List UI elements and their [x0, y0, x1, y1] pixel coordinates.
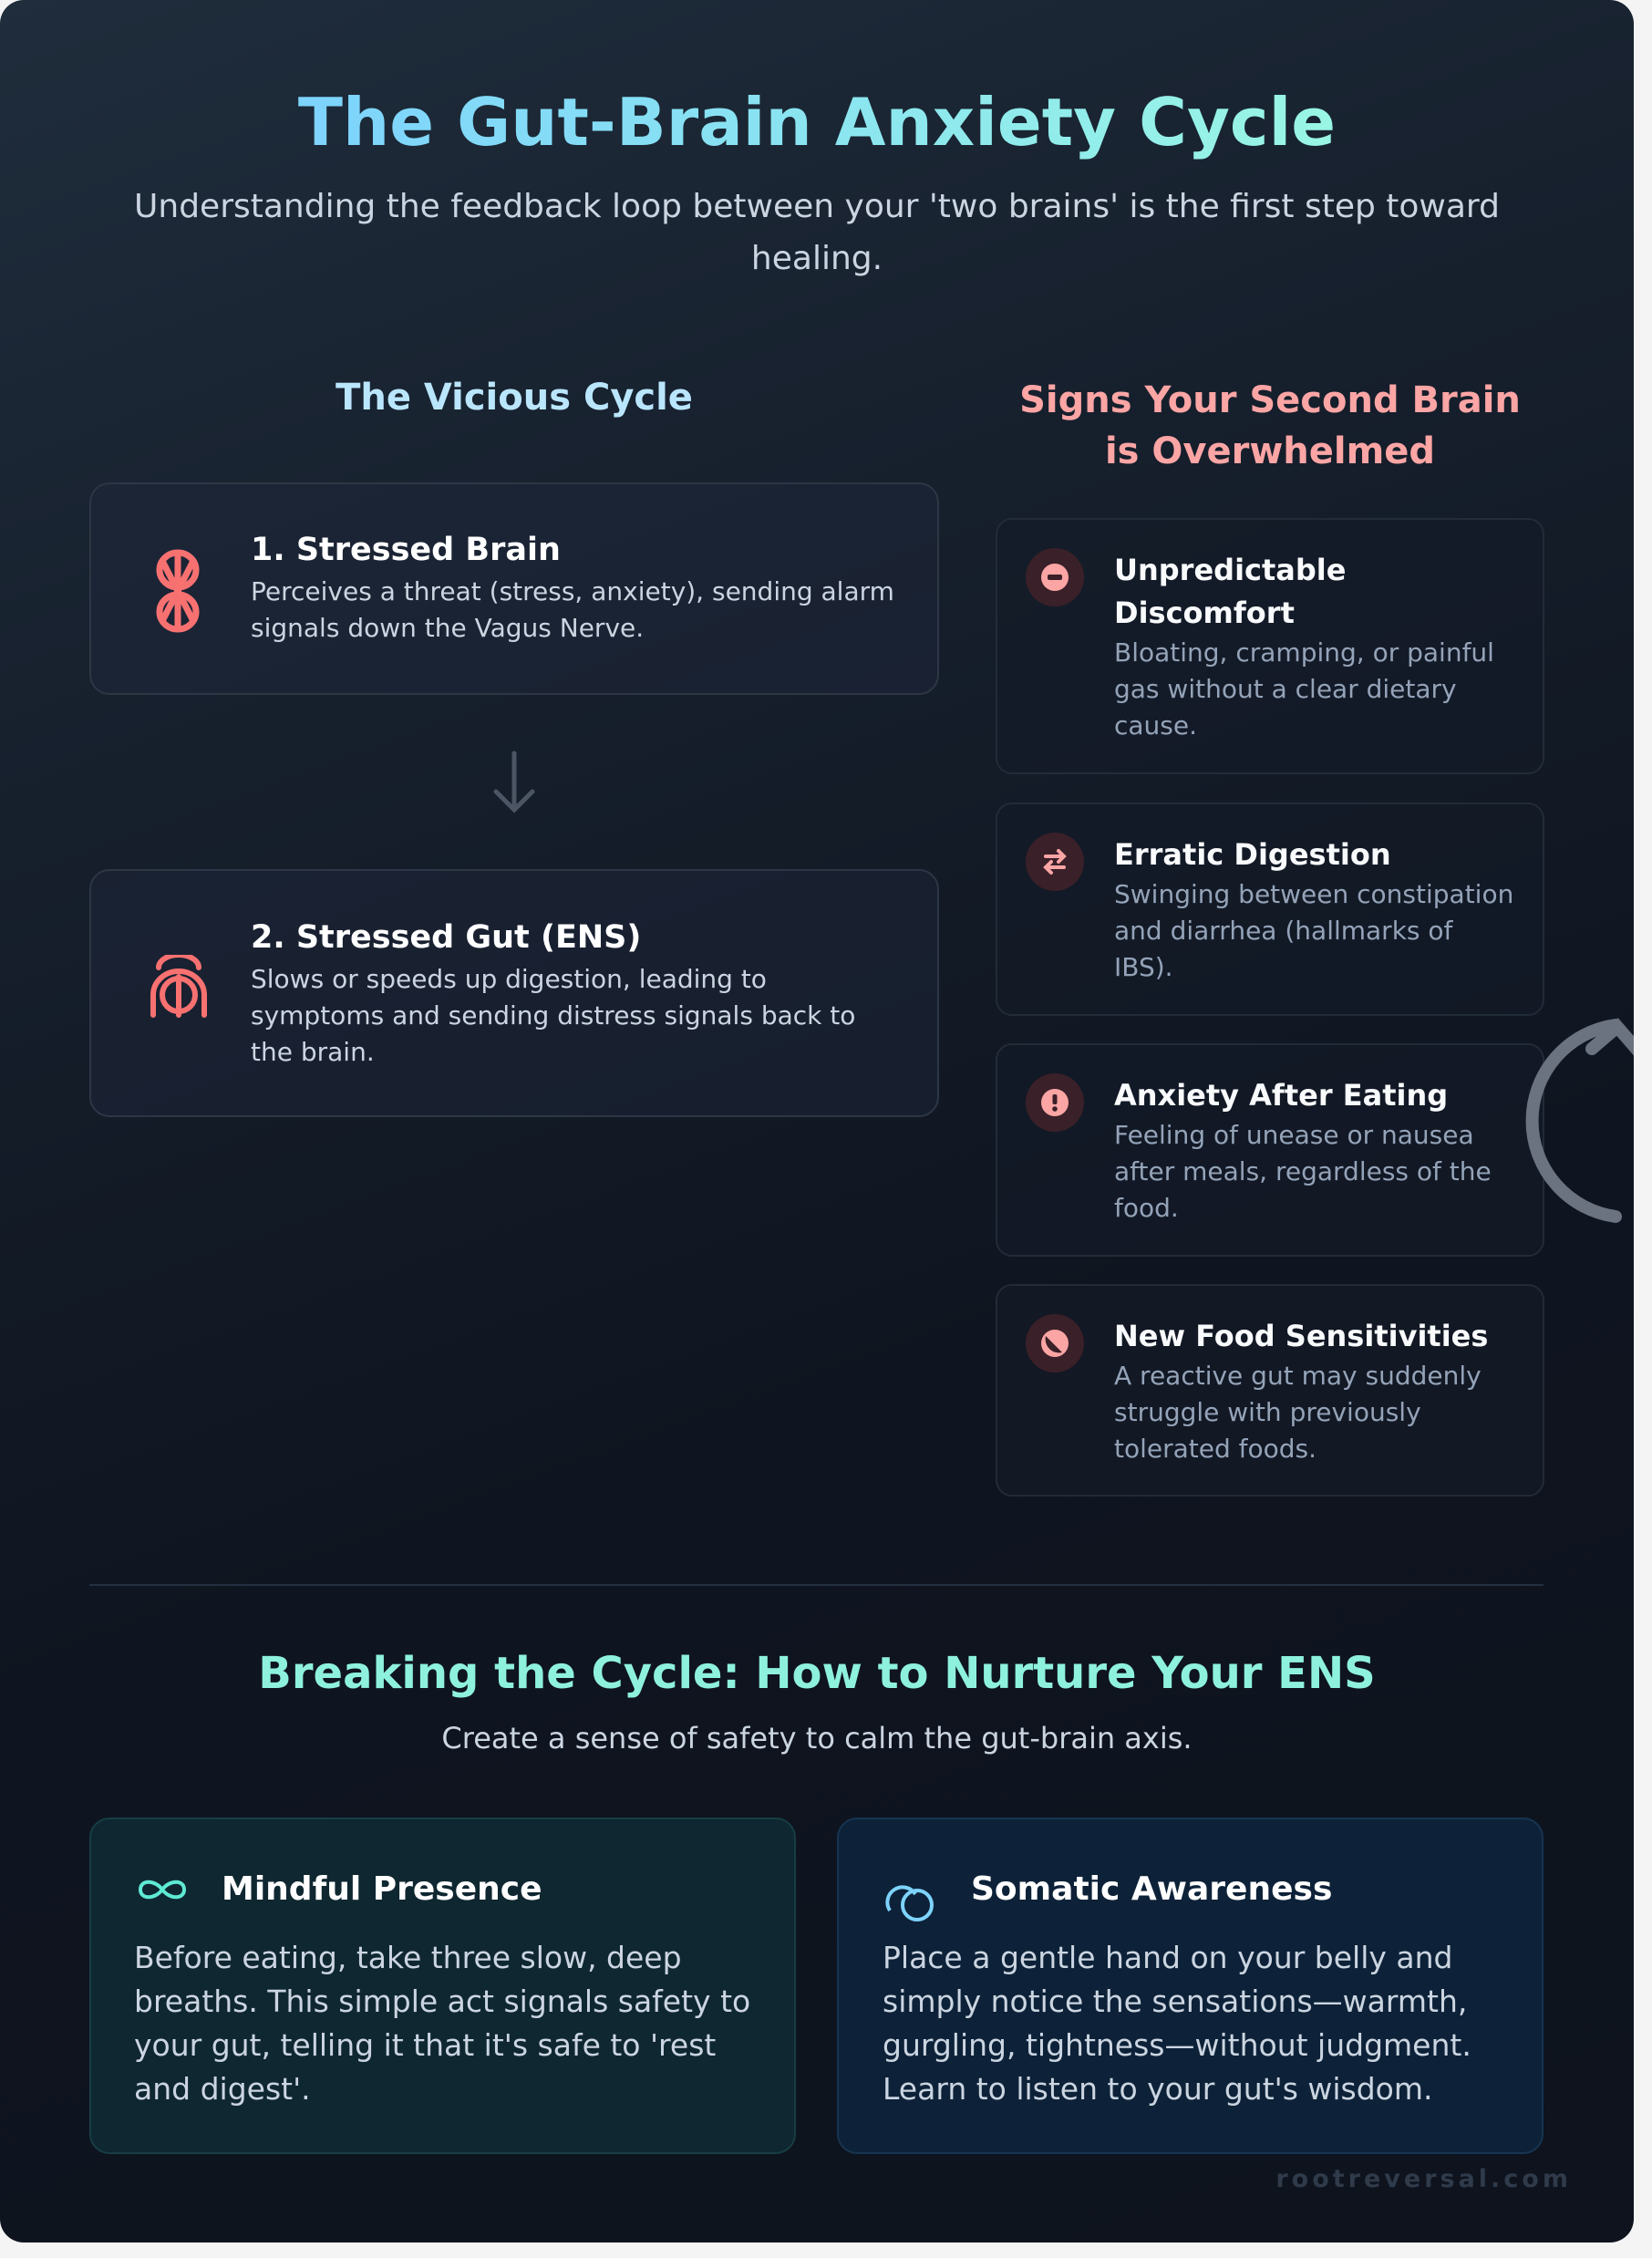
icon: blocked — [1026, 1314, 1084, 1372]
title: The Gut-Brain Anxiety Cycle — [298, 84, 1336, 161]
heading: vicious cycle: The Vicious Cycle — [336, 377, 693, 419]
sign: new food sensitivities: tolerated foods. — [1114, 1434, 1316, 1464]
sign: anxiety after eating: after meals, regardless of the — [1114, 1156, 1492, 1186]
sign: erratic digestion — [996, 803, 1544, 1016]
text: 1. Stressed Brain — [251, 532, 561, 568]
body: Place a gentle hand on your belly and simply notice the sensations—warmth, gurgling, tightness—without judgment. Learn to listen to your gut's wisdom. — [883, 1940, 1471, 2107]
panel: stressed brain — [89, 482, 939, 695]
icon: cycle arrow — [1526, 1018, 1634, 1223]
icon: swap — [1026, 833, 1084, 891]
body: Before eating, take three slow, deep breaths. This simple act signals safety to your gut, telling it that it's safe to 'rest and digest'. — [134, 1940, 750, 2107]
heading: signs — [1019, 379, 1521, 472]
sign: unpredictable discomfort — [996, 518, 1544, 774]
icon: gut — [150, 955, 207, 1018]
sign: new food sensitivities — [996, 1284, 1544, 1497]
sign: unpredictable discomfort: cause. — [1114, 710, 1197, 741]
sign: erratic digestion: IBS). — [1114, 952, 1173, 982]
panel: mindful presence — [89, 1818, 796, 2154]
sign: anxiety after eating: Feeling of unease or nausea — [1114, 1120, 1474, 1150]
subtitle: Understanding the feedback loop between your 'two brains' is the first step toward healing. — [134, 188, 1500, 277]
icon: exclamation — [1026, 1073, 1084, 1132]
text — [251, 532, 894, 643]
sign: unpredictable discomfort: Discomfort — [1114, 596, 1295, 630]
sign: anxiety after eating: food. — [1114, 1193, 1179, 1223]
text: the brain. — [251, 1037, 375, 1067]
arrow: down — [494, 751, 534, 813]
text — [251, 919, 855, 1067]
sign: anxiety after eating — [996, 1043, 1544, 1257]
sign: unpredictable discomfort: gas without a clear dietary — [1114, 674, 1457, 704]
sign: new food sensitivities: struggle with previously — [1114, 1397, 1421, 1427]
sign: new food sensitivities: New Food Sensitivities — [1114, 1319, 1488, 1353]
footer: site: rootreversal.com — [1275, 2165, 1572, 2193]
title: Somatic Awareness — [971, 1870, 1332, 1908]
icon: circles — [885, 1885, 934, 1921]
subheading: Create a sense of safety to calm the gut-brain axis. — [441, 1721, 1193, 1756]
icon: infinity — [139, 1880, 186, 1899]
panel: stressed gut — [89, 869, 939, 1117]
sign: erratic digestion: and diarrhea (hallmarks of — [1114, 916, 1452, 946]
icon: brain — [157, 549, 199, 633]
heading: signs: Signs Your Second Brain — [1019, 379, 1521, 421]
sign: unpredictable discomfort: Bloating, cramping, or painful — [1114, 637, 1494, 668]
heading: signs: is Overwhelmed — [1105, 430, 1435, 472]
divider — [89, 1584, 1544, 1586]
text: symptoms and sending distress signals back to — [251, 1000, 855, 1031]
text: Perceives a threat (stress, anxiety), sending alarm — [251, 576, 894, 606]
title: Mindful Presence — [222, 1870, 542, 1908]
text: 2. Stressed Gut (ENS) — [251, 919, 641, 956]
sign: new food sensitivities: A reactive gut may suddenly — [1114, 1361, 1482, 1391]
text: signals down the Vagus Nerve. — [251, 613, 644, 643]
sign: anxiety after eating: Anxiety After Eating — [1114, 1078, 1448, 1113]
sign: erratic digestion: Swinging between constipation — [1114, 879, 1513, 909]
icon: minus — [1026, 548, 1084, 606]
sign: unpredictable discomfort: Unpredictable — [1114, 553, 1346, 587]
sign: erratic digestion: Erratic Digestion — [1114, 837, 1391, 872]
heading: breaking the cycle: Breaking the Cycle: How to Nurture Your ENS — [258, 1648, 1376, 1699]
panel: somatic awareness — [837, 1818, 1544, 2154]
text: Slows or speeds up digestion, leading to — [251, 964, 767, 994]
